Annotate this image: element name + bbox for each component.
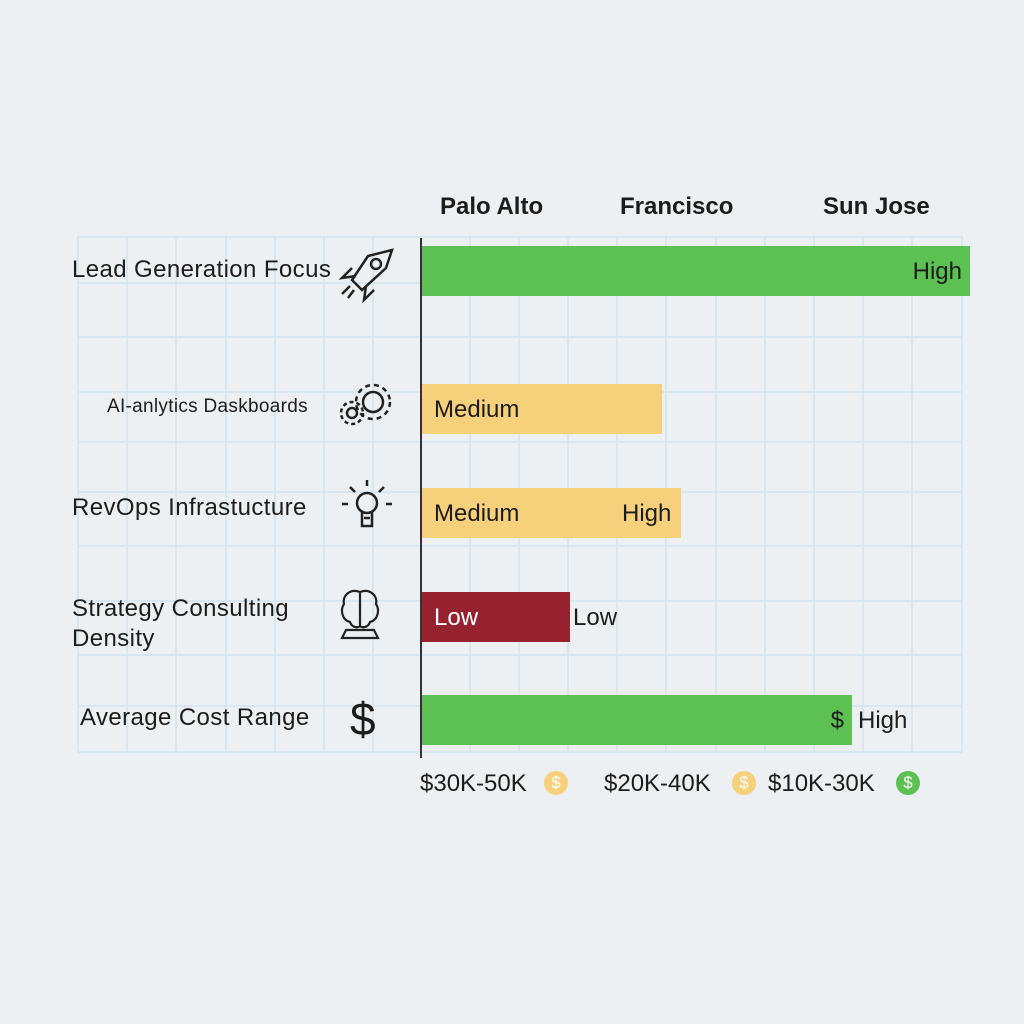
- column headers: Palo Alto: [440, 193, 543, 220]
- cost range legend: $: [739, 773, 749, 792]
- bar: revops medium/high: Medium: [434, 500, 519, 527]
- value: high outside: High: [858, 707, 907, 734]
- icon: rocket: [338, 248, 394, 304]
- icon: gears: [340, 384, 392, 426]
- icon: dollar: $: [350, 693, 376, 745]
- cost range legend: $20K-40K: [604, 770, 711, 797]
- bar: lead generation high: High: [913, 258, 962, 285]
- bar: strategy low: [422, 592, 570, 642]
- bar: lead generation high: [422, 246, 970, 296]
- icon: lightbulb: [342, 480, 392, 528]
- row label: ai analytics: AI-anlytics Daskboards: [107, 396, 308, 417]
- bar: ai analytics medium: Medium: [434, 396, 519, 423]
- cost range legend: [420, 770, 920, 797]
- column headers: Sun Jose: [823, 193, 930, 220]
- value: low outside: Low: [573, 604, 617, 631]
- bar: average cost high: $: [831, 707, 844, 734]
- row label: average cost: Average Cost Range: [80, 704, 310, 731]
- column headers: [440, 193, 930, 220]
- cost range legend: $30K-50K: [420, 770, 527, 797]
- icon: brain: [340, 590, 380, 640]
- bar: revops medium/high: [422, 488, 681, 538]
- row label: strategy consulting: [72, 595, 289, 652]
- column headers: Francisco: [620, 193, 733, 220]
- bar: strategy low: Low: [434, 604, 478, 631]
- cost range legend: $: [903, 773, 913, 792]
- bar: revops medium/high: High: [622, 500, 671, 527]
- row label: revops: RevOps Infrastucture: [72, 494, 307, 521]
- bar: average cost high: [422, 695, 852, 745]
- cost range legend: $: [551, 773, 561, 792]
- row label: strategy consulting: Strategy Consulting: [72, 595, 289, 622]
- cost range legend: $10K-30K: [768, 770, 875, 797]
- row label: strategy consulting: Density: [72, 625, 155, 652]
- row label: lead generation: Lead Generation Focus: [72, 256, 331, 283]
- bar: ai analytics medium: [422, 384, 662, 434]
